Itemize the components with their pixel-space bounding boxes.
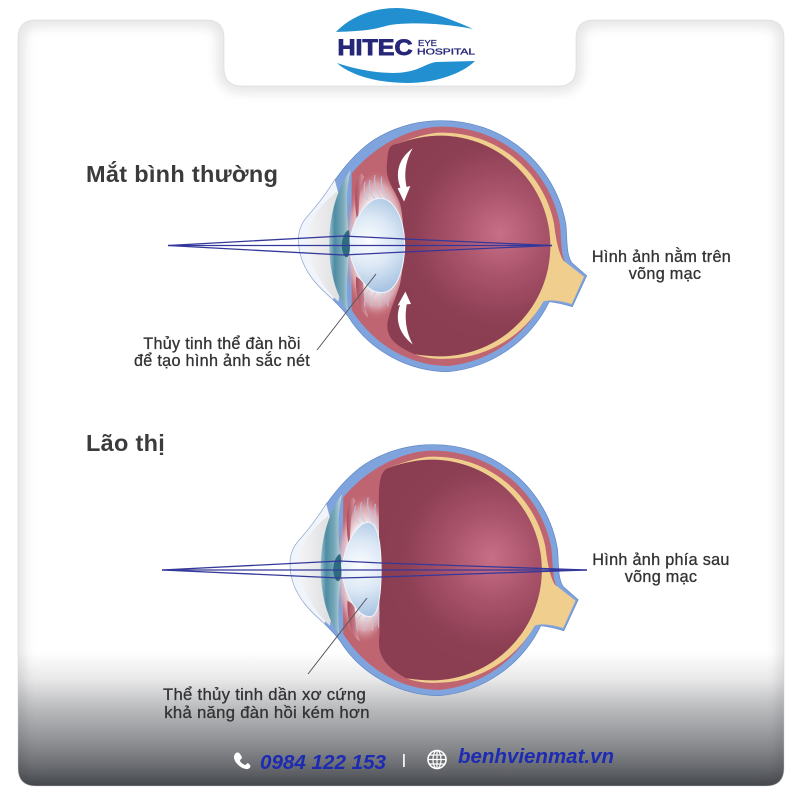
logo: Hitec Eye Hospital: HOSPITAL <box>417 46 475 56</box>
logo: Hitec Eye Hospital: HITEC <box>338 35 413 60</box>
logo: Hitec Eye Hospital <box>336 8 475 83</box>
label: image behind retina <box>592 551 730 586</box>
label: image on retina <box>592 247 731 283</box>
logo: Hitec Eye Hospital: EYE <box>418 38 437 48</box>
lens <box>342 522 381 617</box>
divider <box>403 754 405 767</box>
label: elastic lens: Thủy tinh thể đàn hồi <box>143 335 301 353</box>
label: stiffening lens: Thể thủy tinh dần xơ cứng <box>163 685 366 704</box>
pupil edge <box>333 554 341 581</box>
arrow: lens squeeze up <box>398 292 413 344</box>
pale zone around lens <box>343 170 410 320</box>
cornea <box>298 179 352 300</box>
pale zone around lens <box>335 494 395 644</box>
zonule fibres <box>355 497 379 631</box>
leader line: stiff lens <box>308 598 367 674</box>
vitreous body <box>387 136 550 356</box>
label: image behind retina: võng mạc <box>625 568 697 586</box>
label: image on retina: Hình ảnh nằm trên <box>592 247 731 266</box>
light rays: normal eye <box>168 236 552 255</box>
heading: presbyopia: Lão thị <box>86 430 165 456</box>
anterior chamber <box>307 192 350 302</box>
retina and optic nerve <box>388 457 575 683</box>
light rays: presbyopia eye <box>162 561 587 578</box>
icon: phone <box>234 752 250 769</box>
website: benhvienmat.vn <box>458 745 614 768</box>
cornea <box>290 503 343 624</box>
lens <box>349 198 405 293</box>
label: image behind retina: Hình ảnh phía sau <box>592 551 730 569</box>
iris band <box>329 170 351 312</box>
icon: globe <box>428 750 446 768</box>
ciliary body <box>355 173 368 317</box>
label: stiffening lens: khả năng đàn hồi kém hơn <box>164 703 370 722</box>
diagram: normal eye <box>298 121 587 372</box>
arrow: lens squeeze down <box>398 148 413 202</box>
label: stiffening lens <box>163 685 370 722</box>
zonule fibres <box>364 175 390 307</box>
diagram: presbyopia eye <box>290 445 578 696</box>
leader line: normal lens <box>317 274 376 350</box>
label: elastic lens <box>134 335 310 370</box>
retina and optic nerve <box>397 133 584 359</box>
anterior chamber <box>299 516 341 626</box>
phone number: 0984 122 153 <box>260 751 387 774</box>
choroid <box>343 451 573 690</box>
label: elastic lens: để tạo hình ảnh sắc nét <box>134 351 310 370</box>
label: image on retina: võng mạc <box>629 265 701 283</box>
iris band <box>321 494 342 636</box>
sclera <box>325 445 578 696</box>
heading: normal eye: Mắt bình thường <box>86 160 278 187</box>
footer contact bar <box>234 745 614 774</box>
vitreous body <box>379 460 542 680</box>
ciliary body <box>347 497 360 641</box>
pupil edge <box>342 230 350 257</box>
choroid <box>352 127 582 366</box>
sclera <box>333 121 587 372</box>
